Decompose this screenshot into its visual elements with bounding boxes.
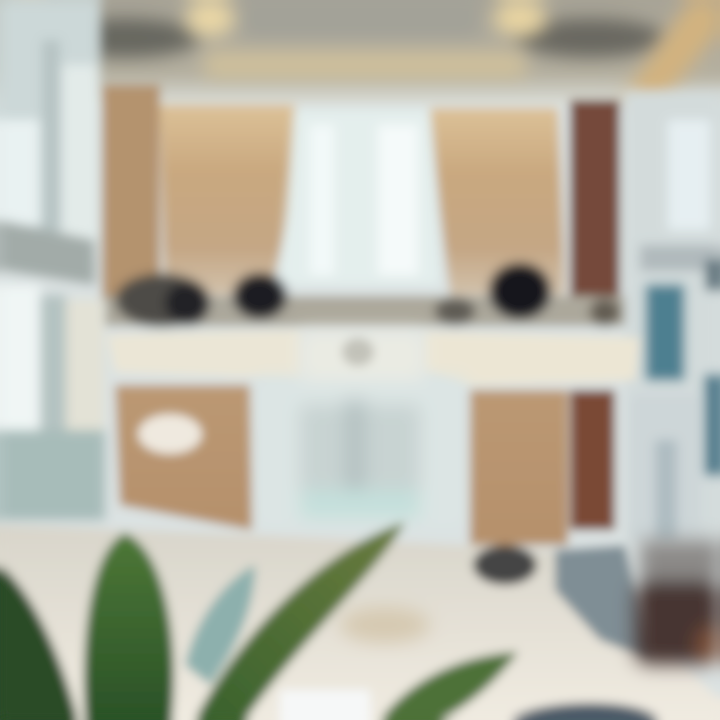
ceiling bbox=[0, 0, 720, 115]
dark brown furniture bbox=[635, 540, 720, 665]
blue panels bbox=[646, 260, 720, 475]
leaf: far left bbox=[0, 565, 78, 720]
lower dark wood column bbox=[570, 390, 615, 530]
bottom right dark object bbox=[510, 703, 660, 720]
leaf: lower right bbox=[380, 652, 518, 720]
left wood column bbox=[102, 85, 160, 300]
leaf: blue-green back bbox=[185, 565, 255, 685]
white wall plate bbox=[138, 414, 202, 454]
upper left wood panel bbox=[160, 105, 295, 295]
upper centre window bbox=[280, 110, 440, 285]
ceiling dark patches bbox=[50, 0, 665, 58]
lower right wall bbox=[630, 395, 700, 540]
floor rug bbox=[340, 607, 430, 643]
horizontal shelf band bbox=[105, 296, 625, 326]
small dark base bbox=[473, 545, 537, 585]
cream counter bbox=[108, 330, 300, 378]
right wall panels bbox=[625, 90, 720, 540]
leaf: centre bbox=[84, 533, 174, 720]
dark speaker objects bbox=[116, 264, 620, 326]
ceiling warm lights bbox=[16, 0, 720, 115]
lower left wood panel bbox=[115, 385, 252, 530]
lower right wood panel bbox=[470, 390, 568, 545]
centre window fixture bbox=[342, 338, 374, 366]
upper right wood panel bbox=[430, 108, 565, 295]
sofa blue-grey bbox=[555, 545, 650, 660]
plant bbox=[0, 522, 518, 720]
lower centre window bbox=[255, 330, 465, 526]
floor bright reflection bbox=[280, 690, 370, 720]
leaf: long diagonal bbox=[195, 522, 405, 720]
left windows bbox=[0, 0, 105, 520]
upper dark wood column bbox=[570, 100, 620, 305]
floor bbox=[0, 525, 720, 720]
cream counter right bbox=[425, 332, 640, 385]
